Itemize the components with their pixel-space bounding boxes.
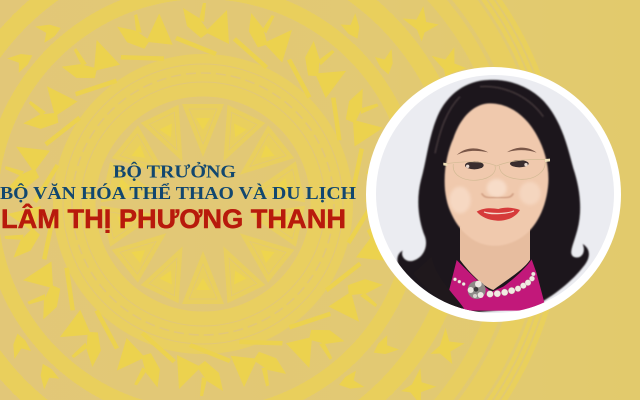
dress	[448, 259, 545, 311]
lips	[477, 208, 520, 221]
portrait frame	[366, 67, 621, 322]
photo backdrop	[376, 75, 614, 313]
heading: position: BỘ TRƯỞNG	[113, 160, 236, 182]
star triangles	[101, 104, 305, 304]
heading: ministry: BỘ VĂN HÓA THỂ THAO VÀ DU LỊCH	[0, 182, 356, 203]
middle figures band	[3, 11, 403, 399]
eyebrows	[457, 148, 537, 155]
glasses	[443, 159, 549, 180]
bronze drum pattern	[0, 3, 467, 400]
outer figures band	[401, 3, 467, 400]
face	[445, 103, 548, 246]
heading: name: LÂM THỊ PHƯƠNG THANH	[1, 204, 346, 234]
neck	[460, 227, 530, 290]
inner figures band	[0, 3, 406, 396]
dark hair over shoulder	[442, 290, 464, 309]
pearl necklace	[453, 272, 535, 297]
cheek highlight	[449, 187, 471, 213]
eyes	[465, 161, 484, 169]
nose	[482, 193, 513, 198]
brooch	[468, 281, 486, 299]
hair highlights	[435, 86, 543, 153]
hair	[397, 80, 589, 313]
portrait photo	[376, 75, 614, 313]
hatched inner band	[63, 64, 343, 344]
